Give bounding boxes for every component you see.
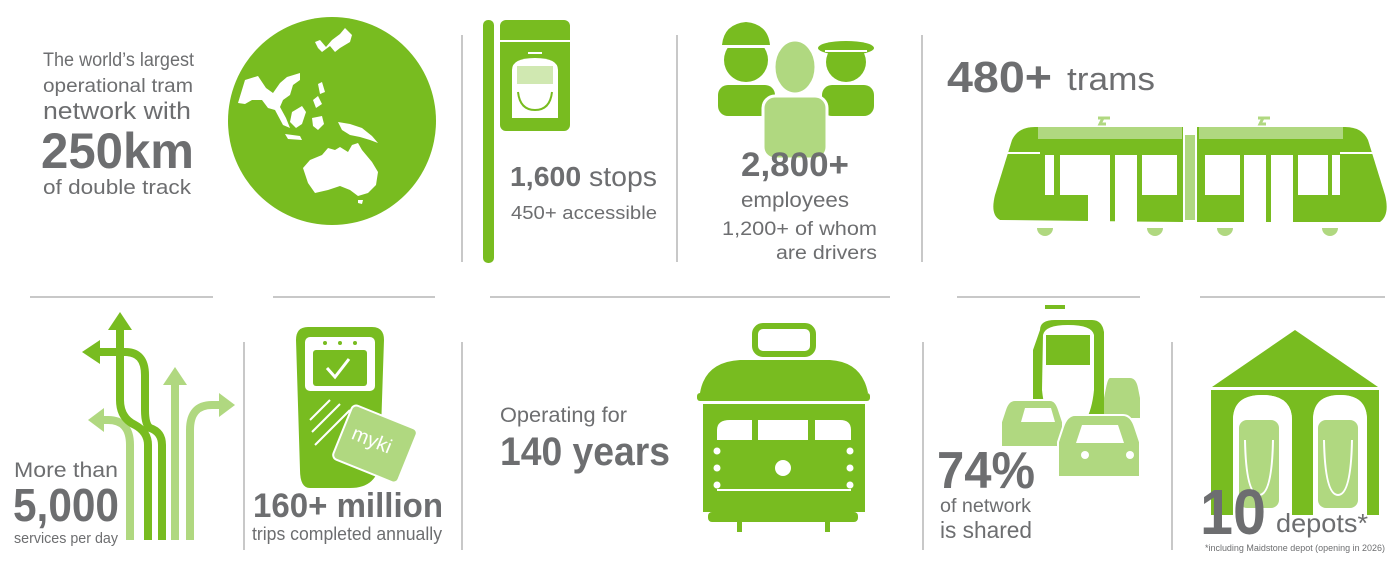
text: depots: *including Maidstone depot (opening in 2026)	[1205, 543, 1385, 553]
text: employees: employees	[741, 189, 849, 212]
text: operating years: 140 years	[500, 430, 670, 474]
text: shared network: is shared	[940, 517, 1032, 543]
text: employees: 1,200+ of whom	[722, 219, 877, 240]
icon: modern tram	[993, 118, 1387, 236]
text: employees: are drivers	[776, 243, 877, 264]
text: largest network: network with	[43, 98, 191, 125]
icon: route arrows	[82, 312, 235, 540]
text: shared network: 74%	[937, 442, 1035, 500]
text: depots: depots*	[1276, 508, 1368, 538]
icon: tram and cars	[1001, 305, 1140, 477]
text: trips: trips completed annually	[252, 524, 442, 544]
text: services	[13, 459, 119, 547]
text: trams: trams	[1067, 61, 1155, 97]
text: stops: 450+ accessible	[511, 203, 657, 223]
text: services: More than	[14, 459, 118, 482]
icon: myki reader: myki	[348, 423, 395, 458]
text: largest network: The world’s largest	[43, 50, 195, 71]
text: largest network: 250km	[41, 123, 194, 179]
text: services: services per day	[14, 530, 118, 547]
text: trams	[947, 53, 1155, 102]
text: operating years: Operating for	[500, 404, 627, 427]
text: stops: 1,600 stops	[510, 161, 657, 192]
text: depots: 10	[1200, 476, 1266, 548]
icon: employees	[718, 22, 874, 159]
text: depots	[1200, 476, 1385, 553]
text: shared network: of network	[940, 496, 1032, 517]
text: largest network: operational tram	[43, 76, 193, 97]
text: trips: 160+ million	[253, 487, 443, 525]
text: services: 5,000	[13, 479, 119, 531]
text: trams: 480+	[947, 53, 1052, 102]
text: employees: 2,800+	[741, 146, 849, 184]
icon: vintage tram	[697, 326, 870, 532]
text: operating years	[500, 404, 670, 474]
text: largest network: of double track	[43, 177, 192, 199]
icon: depot	[1211, 330, 1379, 515]
icon: tram stop sign	[483, 20, 570, 263]
icon: globe	[228, 17, 436, 225]
text: employees	[722, 146, 877, 264]
text: stops	[510, 161, 657, 223]
text: largest network	[41, 50, 195, 199]
text: shared network	[937, 442, 1035, 543]
icon: myki reader	[296, 327, 418, 488]
text: trips	[252, 487, 443, 544]
